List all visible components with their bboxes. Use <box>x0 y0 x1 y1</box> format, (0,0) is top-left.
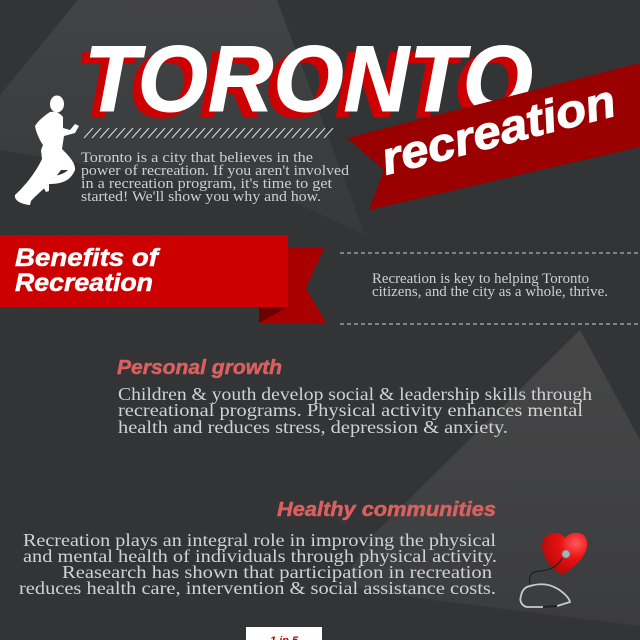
title <box>75 26 533 137</box>
icon: runner <box>15 96 79 205</box>
intro text: in a recreation program, it's time to get <box>81 176 333 192</box>
body: and mental health of individuals through physical activity. <box>23 546 497 566</box>
body: reduces health care, intervention & social assistance costs. <box>19 578 496 598</box>
card: 1 in 5 stat <box>246 627 322 640</box>
background shape: lower triangle <box>340 330 640 626</box>
intro text <box>81 150 350 205</box>
ribbon heading: Benefits of <box>15 244 161 272</box>
benefits intro text <box>372 271 608 300</box>
body: Recreation plays an integral role in improving the physical <box>23 530 496 550</box>
intro text: power of recreation. If you aren't involved <box>81 163 350 179</box>
body: Children & youth develop social & leadership skills through <box>118 384 592 404</box>
body: recreational programs. Physical activity enhances mental <box>118 400 583 420</box>
ribbon: benefits of recreation <box>0 235 326 323</box>
title shadow: TORONTO <box>75 32 524 137</box>
dashed rules <box>340 253 640 324</box>
icon: heart with stethoscope <box>520 533 587 607</box>
title text: TORONTO <box>84 26 533 131</box>
body: Reasearch has shown that participation in recreation <box>62 562 492 582</box>
banner text: recreation <box>375 74 621 185</box>
section: personal growth <box>117 357 592 437</box>
banner: recreation <box>347 63 640 210</box>
background shape: upper triangle <box>0 0 365 235</box>
body <box>118 384 592 437</box>
benefits intro text: Recreation is key to helping Toronto <box>372 271 589 287</box>
section: healthy communities <box>19 499 497 598</box>
ribbon heading: Recreation <box>15 269 153 297</box>
heading: Healthy communities <box>277 499 496 521</box>
body <box>19 530 497 598</box>
intro text: Toronto is a city that believes in the <box>81 150 313 166</box>
heading: Personal growth <box>117 357 282 379</box>
benefits intro text: citizens, and the city as a whole, thrive. <box>372 284 608 300</box>
hatch divider <box>84 128 333 138</box>
intro text: started! We'll show you why and how. <box>81 189 321 205</box>
body: health and reduces stress, depression & anxiety. <box>118 417 508 437</box>
